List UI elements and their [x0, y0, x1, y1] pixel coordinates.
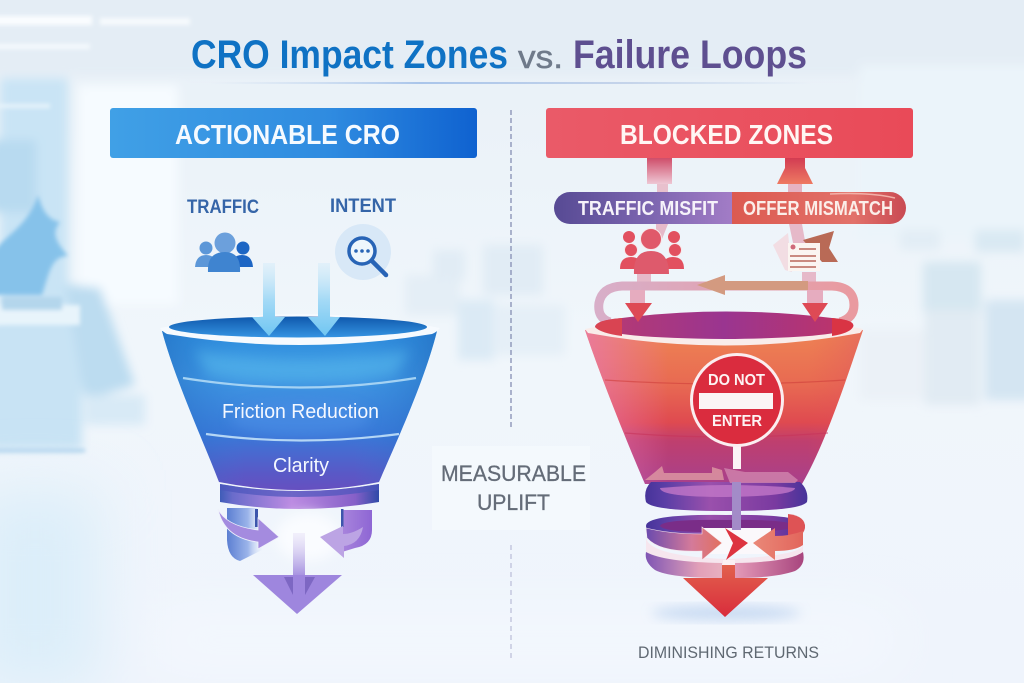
stop sign: do not enter: ENTER [712, 413, 762, 430]
arrow: red down tip [651, 565, 801, 620]
loops at funnel neck [645, 482, 807, 578]
panel: actionable CRO funnel [110, 108, 477, 614]
callout: measurable uplift: UPLIFT [477, 490, 550, 515]
callout: measurable uplift: MEASURABLE [441, 461, 586, 486]
loop arrow over funnel rim [599, 275, 854, 322]
icon: red people [620, 228, 684, 274]
icon: traffic people [195, 232, 253, 272]
funnel label: friction reduction: Friction Reduction [222, 401, 379, 423]
loop arrows [218, 508, 372, 561]
title: vs. [518, 39, 563, 75]
heading: actionable CRO: ACTIONABLE CRO [175, 119, 400, 150]
heading: actionable CRO [110, 108, 477, 158]
blue funnel body [160, 314, 440, 490]
label: diminishing returns: DIMINISHING RETURNS [638, 643, 819, 662]
arrow: output [253, 533, 342, 614]
icon: offer document [773, 231, 838, 272]
funnel collar [220, 484, 379, 509]
pill: traffic misfit and offer mismatch [554, 192, 906, 224]
stop sign: do not enter [690, 353, 784, 579]
heading: blocked zones [546, 108, 913, 158]
funnel label: clarity: Clarity [273, 455, 329, 477]
label: intent: INTENT [330, 196, 396, 217]
label: traffic: TRAFFIC [187, 197, 259, 218]
title [191, 33, 807, 77]
title: Failure Loops [573, 33, 807, 77]
arrows into red funnel [625, 290, 828, 322]
stop sign: do not enter: DO NOT [708, 372, 765, 389]
callout: measurable uplift [432, 446, 590, 530]
arrows above pill [647, 158, 813, 194]
red loop arrows [645, 466, 803, 560]
icon: intent magnifier [335, 224, 391, 280]
white glow under collar [276, 513, 340, 561]
heading: blocked zones: BLOCKED ZONES [620, 119, 833, 150]
arrows: traffic and intent into funnel [252, 263, 340, 336]
title: CRO Impact Zones [191, 33, 508, 77]
pill: traffic misfit and offer mismatch: TRAFFIC MISFIT [578, 198, 718, 220]
panel: blocked zones funnel [546, 108, 913, 662]
pill: traffic misfit and offer mismatch: OFFER MISMATCH [743, 198, 893, 220]
stems through icons [637, 224, 816, 284]
red funnel body [585, 312, 863, 484]
